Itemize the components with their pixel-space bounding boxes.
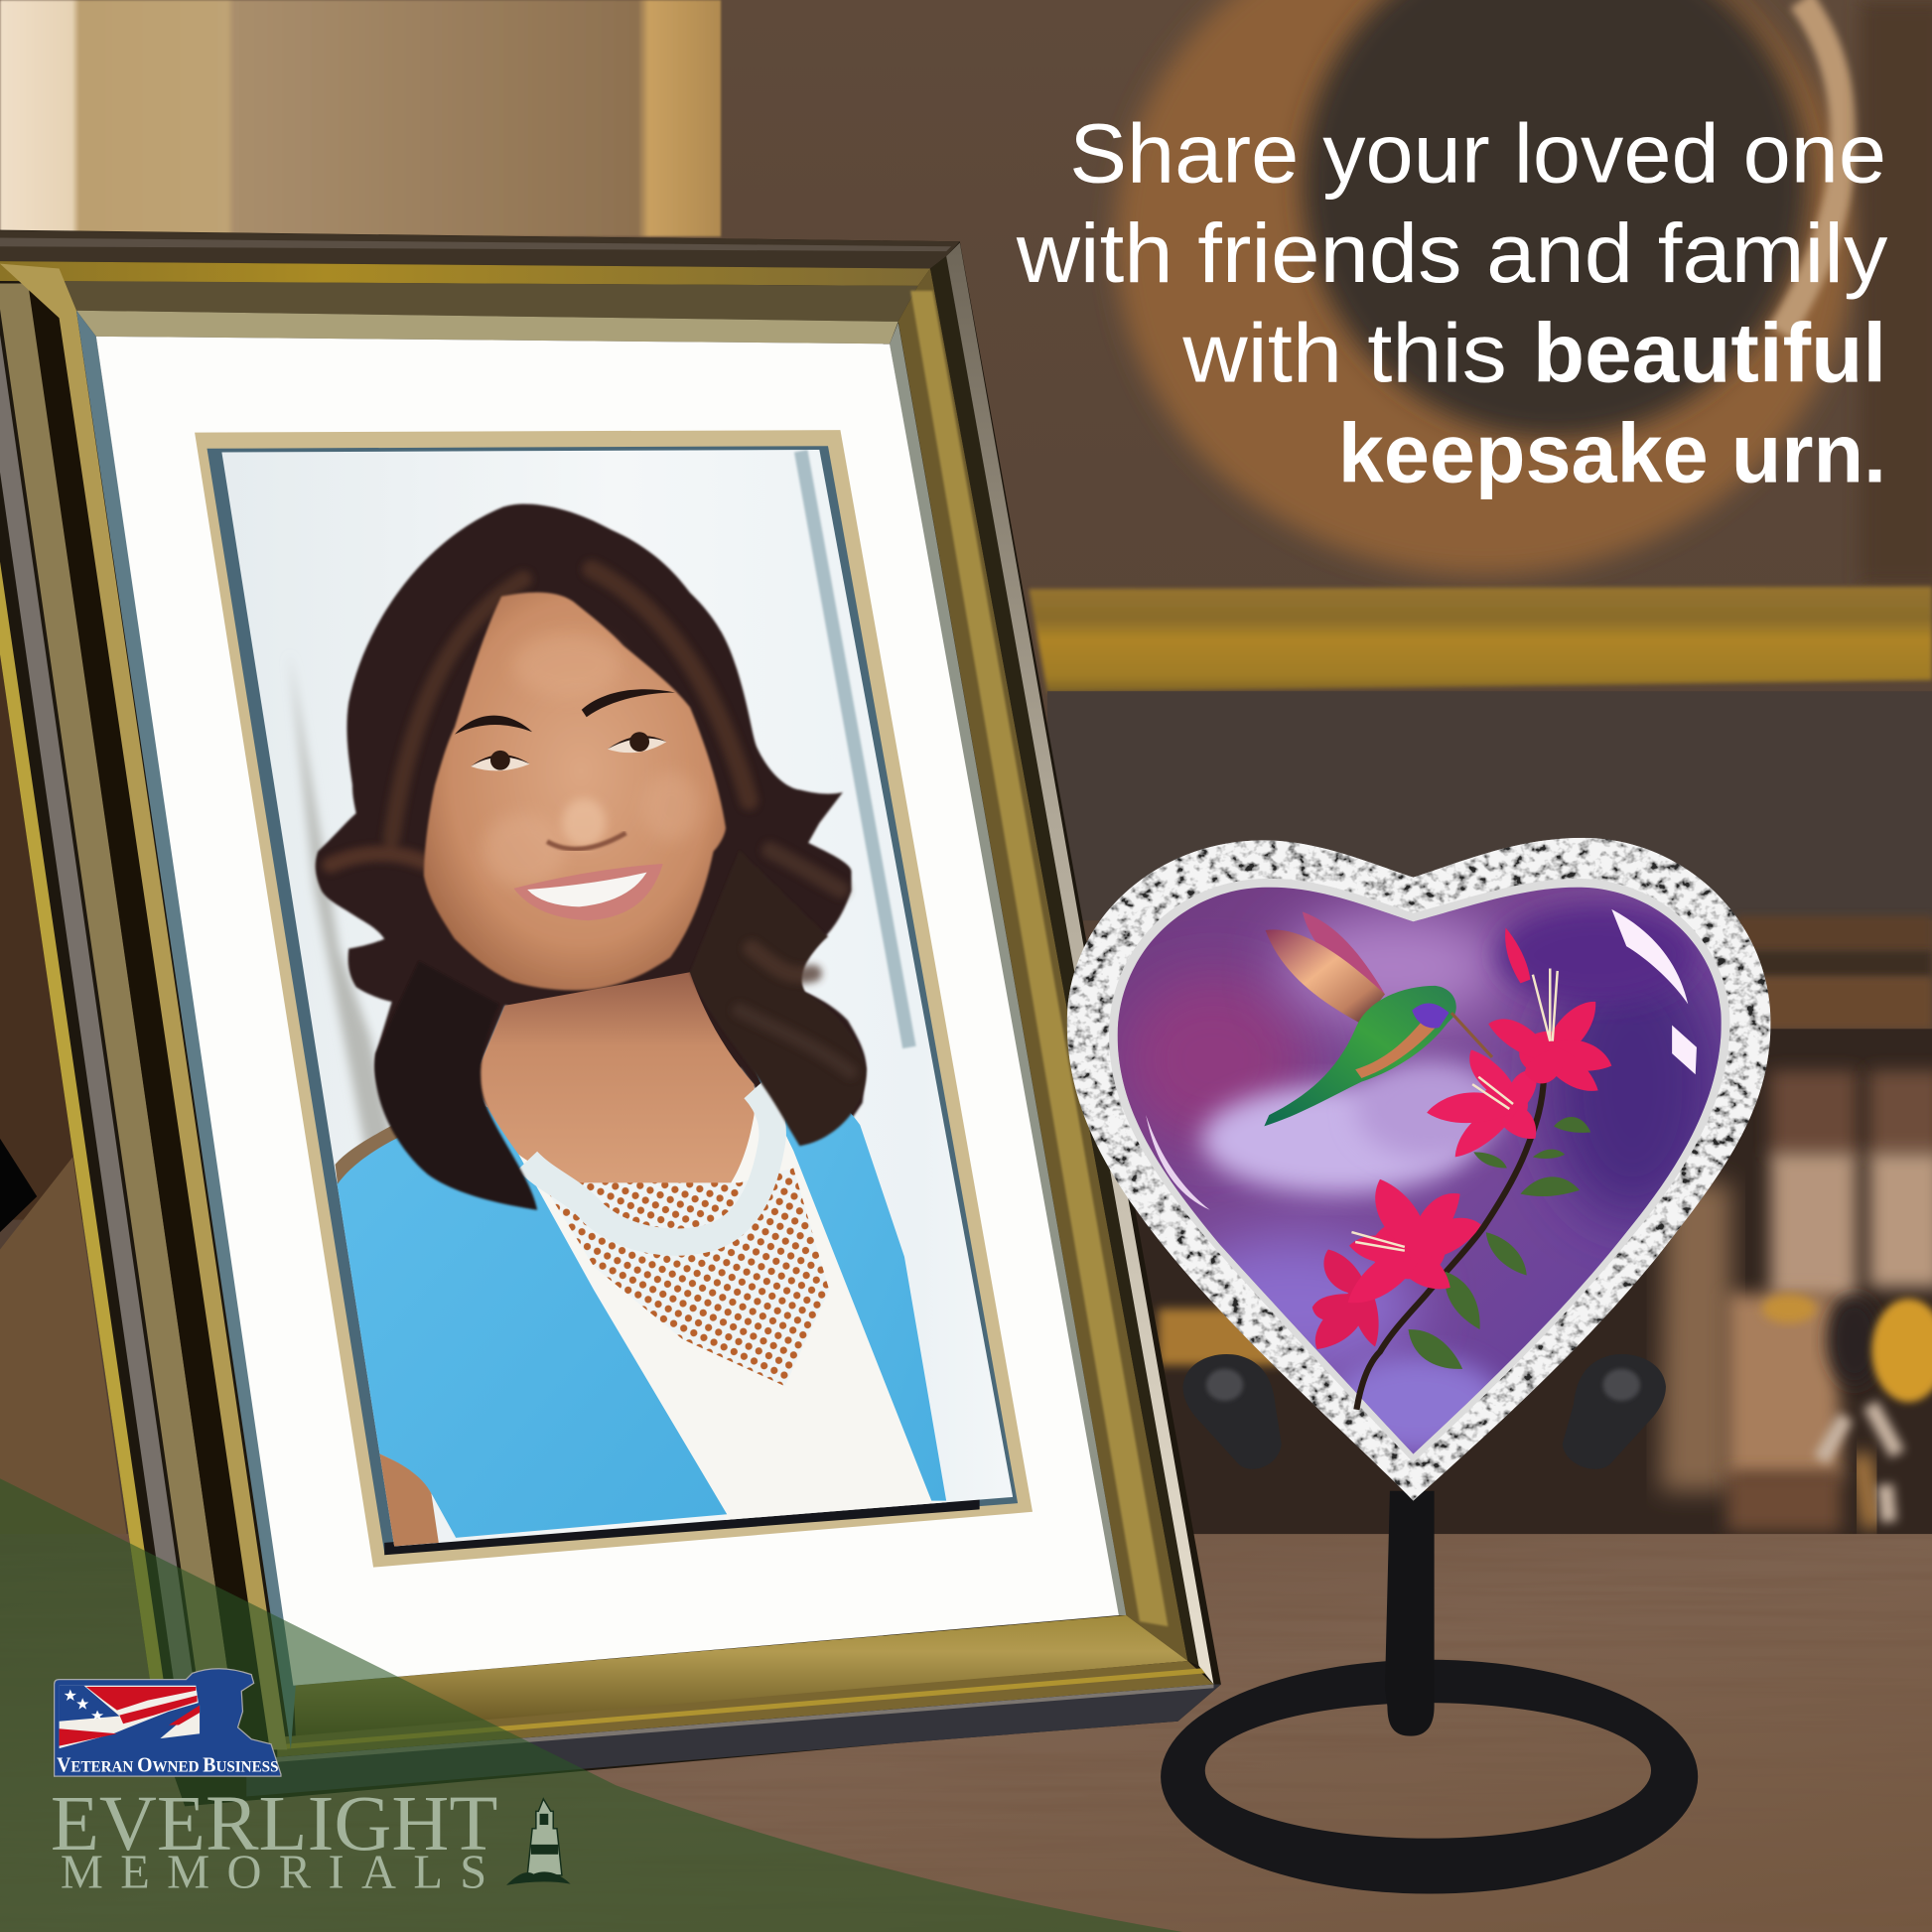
- badge wording: VETERAN OWNED BUSINESS: [57, 1753, 279, 1777]
- right moulding: [898, 269, 1187, 1661]
- headline: [1016, 107, 1888, 499]
- hummingbird: [1264, 911, 1492, 1126]
- curtain and wall panel: [0, 0, 721, 236]
- Everlight Memorials wordmark: EVERLIGHT: [51, 1780, 497, 1867]
- eyebrows: [455, 689, 675, 735]
- top beige lip: [76, 311, 898, 344]
- headline: with this: [1181, 307, 1507, 400]
- photo lower black edge: [384, 1497, 980, 1555]
- icon: lighthouse: [506, 1799, 571, 1885]
- large flower: [1348, 1179, 1481, 1303]
- shoulder trim: [336, 1126, 398, 1183]
- headline: beautiful: [1533, 307, 1886, 400]
- flag union with stars: [60, 1686, 119, 1722]
- picture frame: [0, 229, 1221, 1806]
- arm: [377, 1452, 439, 1547]
- hair silhouette: [314, 502, 868, 1118]
- glass highlights: [1611, 909, 1688, 1004]
- headline: Share your loved one: [1069, 107, 1886, 201]
- right support knob: [1563, 1354, 1666, 1469]
- stand post: [1385, 1491, 1435, 1736]
- lace bib: [542, 1169, 829, 1386]
- blurred shelf and books: [1084, 915, 1932, 1537]
- nose: [562, 798, 607, 848]
- face: [424, 593, 726, 990]
- headline: with friends and family: [1016, 207, 1888, 300]
- mat edge: [76, 311, 296, 1749]
- middle flower: [1427, 1049, 1537, 1157]
- top flower with bud: [1488, 928, 1611, 1091]
- right hair lock: [689, 933, 868, 1148]
- leaves: [1409, 1117, 1590, 1369]
- neck and chest: [479, 972, 755, 1183]
- portrait photo: [222, 450, 1013, 1547]
- wooden table: [0, 1534, 1932, 1932]
- white top: [726, 1184, 947, 1520]
- green corner overlay: [0, 1478, 1182, 1932]
- smile: [514, 864, 663, 920]
- top moulding dark band: [0, 230, 960, 269]
- mat board: [96, 337, 1119, 1686]
- lace collar: [527, 1089, 772, 1242]
- badge silhouette: [55, 1669, 281, 1776]
- top olive band: [50, 281, 918, 322]
- top gold band: [0, 261, 930, 286]
- heart urn: [1047, 826, 1787, 1516]
- left hair lock: [375, 961, 537, 1210]
- blue jacket right: [755, 1047, 946, 1501]
- Everlight Memorials wordmark: MEMORIALS: [61, 1846, 486, 1898]
- window strip: [801, 451, 909, 1047]
- frame dark base: [0, 229, 1221, 1806]
- headline: keepsake urn.: [1338, 406, 1886, 499]
- flag field: [60, 1686, 199, 1748]
- bottom moulding: [293, 1615, 1187, 1737]
- gold wall rail: [1029, 587, 1932, 692]
- lower flower: [1312, 1249, 1379, 1349]
- left dark wall and frame backing: [0, 234, 98, 1220]
- left support knob: [1182, 1354, 1282, 1469]
- inner gold bevel: [195, 430, 1033, 1568]
- urn stand: [1161, 1491, 1698, 1894]
- purple enamel face: [1109, 875, 1737, 1466]
- flower stem: [1356, 1077, 1544, 1410]
- silver engraved rim: [1047, 826, 1787, 1516]
- blue jacket left: [336, 1097, 727, 1538]
- left moulding bands: [0, 283, 170, 1725]
- eyes: [471, 737, 666, 770]
- hair highlights: [331, 569, 850, 1072]
- blurred round mirror: [1115, 0, 1932, 586]
- stand ring base: [1161, 1660, 1698, 1894]
- veteran owned business badge: [55, 1669, 281, 1777]
